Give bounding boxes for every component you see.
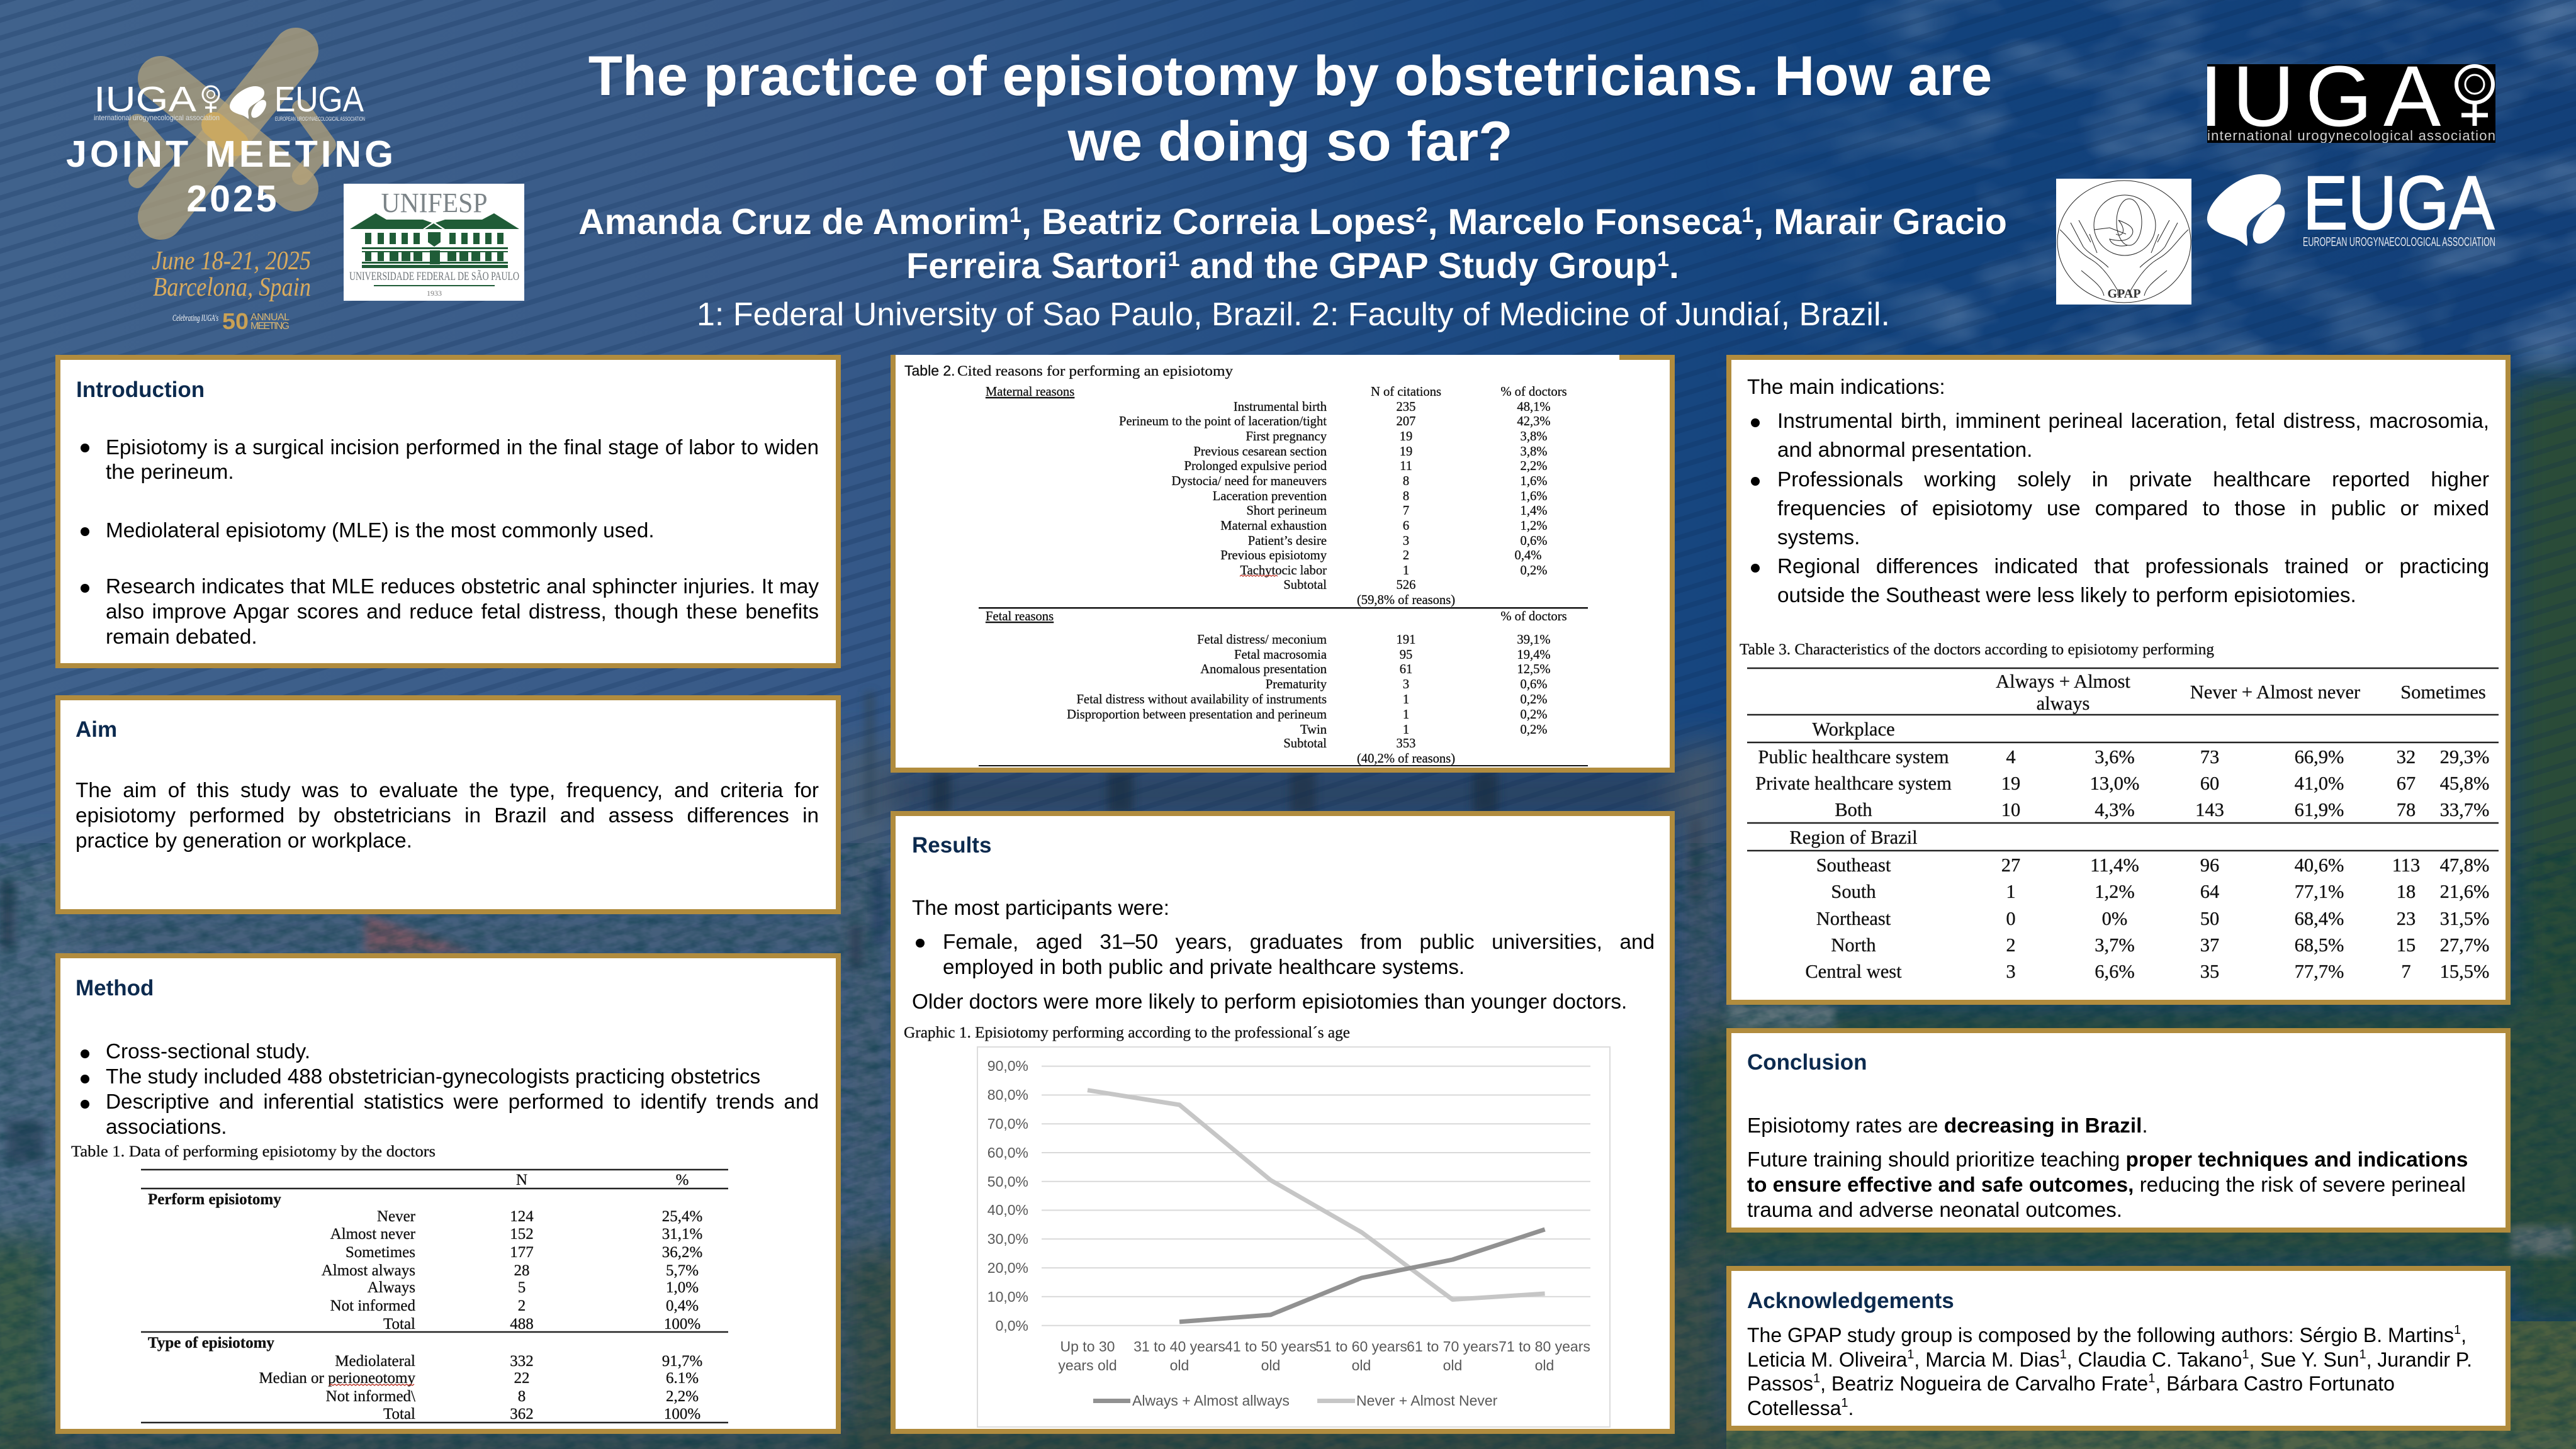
y axis labels: 30,0% bbox=[987, 1231, 1028, 1247]
y axis labels: 40,0% bbox=[987, 1202, 1028, 1218]
heading: aim: Aim bbox=[76, 717, 117, 742]
bullet list: introduction: Episiotomy is a surgical incision performed in the final stage of labor to widen bbox=[106, 435, 819, 459]
bullet list: introduction: the perineum. bbox=[106, 461, 234, 484]
y axis labels: 0,0% bbox=[996, 1318, 1028, 1334]
anniversary mark: MEETING bbox=[250, 321, 290, 332]
conclusion recommendation: to ensure effective and safe outcomes, reducing the risk of severe perineal bbox=[1747, 1173, 2466, 1197]
table 3: Northeast bbox=[1816, 908, 1891, 929]
authors: Amanda Cruz de Amorim1, Beatriz Correia Lopes2, Marcelo Fonseca1, Marair Gracio bbox=[578, 202, 2007, 242]
table 1: Total bbox=[383, 1406, 415, 1423]
table 1 caption: Table 1. Data of performing episiotomy by the doctors bbox=[71, 1142, 436, 1160]
table 3: 33,7% bbox=[2440, 799, 2489, 820]
table 2: Maternal exhaustion bbox=[1220, 519, 1327, 533]
authors bbox=[578, 202, 2007, 287]
table 3: 3,7% bbox=[2095, 934, 2135, 956]
table 3: 27 bbox=[2001, 854, 2020, 876]
logo: UNIFESP: UNIFESP bbox=[381, 187, 487, 218]
table 3: Private healthcare system bbox=[1755, 773, 1952, 794]
table 2: 1 bbox=[1403, 708, 1409, 722]
table 1: 488 bbox=[510, 1316, 534, 1333]
bullet list: indications: Regional differences indicated that professionals trained or practicing bbox=[1777, 555, 2489, 578]
small IUGA logotype: IUGA bbox=[94, 79, 196, 120]
table 2: 42,3% bbox=[1517, 415, 1551, 428]
table 2: 0,4% bbox=[1515, 549, 1541, 562]
bullet list: indications: systems. bbox=[1777, 526, 1860, 549]
x axis labels: old bbox=[1535, 1357, 1554, 1373]
anniversary mark: ANNUAL bbox=[250, 312, 290, 323]
series: always + almost always bbox=[1179, 1229, 1545, 1322]
table 2: Dystocia/ need for maneuvers bbox=[1172, 474, 1327, 488]
table 1: Always bbox=[368, 1279, 415, 1296]
panel: results bbox=[891, 811, 1675, 1434]
graphic 1 caption: Graphic 1. Episiotomy performing according to the professional´s age bbox=[904, 1024, 1350, 1041]
conclusion recommendation bbox=[1747, 1148, 2468, 1223]
table 3: 32 bbox=[2397, 746, 2416, 768]
table 3: 23 bbox=[2397, 908, 2416, 929]
table 1: 332 bbox=[510, 1353, 534, 1370]
acknowledgements text: Cotellessa1. bbox=[1747, 1396, 1853, 1419]
legend: Never + Almost Never bbox=[1356, 1392, 1498, 1409]
bullet list: introduction bbox=[81, 435, 819, 649]
table 2: Tachytocic labor bbox=[1240, 564, 1327, 578]
x axis labels: old bbox=[1443, 1357, 1462, 1373]
title bbox=[588, 44, 1992, 174]
table 1: 6.1% bbox=[666, 1370, 699, 1387]
table 3: 4,3% bbox=[2095, 799, 2135, 820]
table 1: 100% bbox=[664, 1316, 700, 1333]
table 3: 4 bbox=[2006, 746, 2016, 768]
panel: aim bbox=[55, 695, 841, 914]
table 1: Never bbox=[377, 1208, 416, 1225]
anniversary mark: 50 bbox=[222, 308, 249, 334]
table 3: North bbox=[1831, 934, 1876, 956]
table 3: 3,6% bbox=[2095, 746, 2135, 768]
panel: acknowledgements bbox=[1726, 1266, 2511, 1431]
x axis labels: old bbox=[1352, 1357, 1371, 1373]
table 3: 50 bbox=[2200, 908, 2219, 929]
panel: introduction bbox=[55, 355, 841, 668]
table 2: 2,2% bbox=[1521, 459, 1547, 473]
table 3: 40,6% bbox=[2295, 854, 2344, 876]
logo: UNIFESP bbox=[344, 184, 524, 301]
authors: Ferreira Sartori1 and the GPAP Study Group1. bbox=[906, 246, 1679, 286]
table 2: 235 bbox=[1397, 400, 1415, 414]
table 3: 60 bbox=[2200, 773, 2219, 794]
table 3: Sometimes bbox=[2400, 681, 2486, 703]
panel: method bbox=[55, 953, 841, 1434]
table 1: Not informed bbox=[330, 1297, 415, 1314]
table 2: Twin bbox=[1300, 723, 1327, 737]
table 3 caption: Table 3. Characteristics of the doctors according to episiotomy performing bbox=[1740, 641, 2214, 658]
conclusion recommendation: trauma and adverse neonatal outcomes. bbox=[1747, 1199, 2122, 1222]
table 2: Patient’s desire bbox=[1248, 534, 1327, 548]
table 3: 0 bbox=[2006, 908, 2016, 929]
results note: Older doctors were more likely to perform episiotomies than younger doctors. bbox=[912, 990, 1627, 1014]
results bullet: employed in both public and private healthcare systems. bbox=[943, 956, 1465, 979]
aim text: The aim of this study was to evaluate the type, frequency, and criteria for bbox=[76, 779, 819, 802]
logo: GPAP bbox=[2056, 179, 2191, 305]
bullet list: indications: Instrumental birth, imminent perineal laceration, fetal distress, macrosomia, bbox=[1777, 410, 2489, 433]
y axis labels: 50,0% bbox=[987, 1173, 1028, 1190]
table 2: 11 bbox=[1400, 459, 1412, 473]
legend: Always + Almost allways bbox=[1132, 1392, 1290, 1409]
table 1: Almost always bbox=[322, 1262, 415, 1279]
logo: GPAP: GPAP bbox=[2108, 287, 2140, 301]
x axis labels: old bbox=[1170, 1357, 1189, 1373]
table 2: Fetal distress without availability of instruments bbox=[1076, 693, 1327, 707]
table 1: 1,0% bbox=[666, 1279, 699, 1296]
aim text: practice by generation or workplace. bbox=[76, 829, 412, 853]
table 3: 6,6% bbox=[2095, 961, 2135, 982]
table 3: 77,7% bbox=[2295, 961, 2344, 982]
line chart bbox=[976, 1046, 1611, 1428]
table 2: 3 bbox=[1403, 534, 1409, 548]
table 1: 124 bbox=[510, 1208, 534, 1225]
table 3: 64 bbox=[2200, 881, 2219, 902]
y axis labels: 60,0% bbox=[987, 1144, 1028, 1161]
x axis labels: old bbox=[1261, 1357, 1280, 1373]
table 3: Central west bbox=[1805, 961, 1902, 982]
legend bbox=[1093, 1392, 1498, 1409]
affiliations: 1: Federal University of Sao Paulo, Brazil. 2: Faculty of Medicine of Jundiaí, Brazil. bbox=[697, 296, 1890, 333]
bullet list: indications: outside the Southeast were less likely to perform episiotomies. bbox=[1777, 584, 2356, 607]
table 1: 2,2% bbox=[666, 1388, 699, 1405]
table 1: Sometimes bbox=[346, 1244, 415, 1261]
table 2: 0,2% bbox=[1521, 693, 1547, 707]
table 1: 31,1% bbox=[662, 1226, 702, 1243]
table 3: 96 bbox=[2200, 854, 2219, 876]
x axis labels: 41 to 50 years bbox=[1225, 1338, 1317, 1355]
table 2: % of doctors bbox=[1500, 385, 1567, 399]
table 1: 8 bbox=[518, 1388, 526, 1405]
table 2: Instrumental birth bbox=[1234, 400, 1327, 414]
table 2: Laceration prevention bbox=[1213, 490, 1327, 503]
logo: joint meeting 2025 bbox=[66, 28, 393, 334]
acknowledgements text: The GPAP study group is composed by the following authors: Sérgio B. Martins1, bbox=[1747, 1323, 2466, 1346]
table 2: Maternal reasons bbox=[986, 385, 1074, 399]
bullet list: method: The study included 488 obstetrician-gynecologists practicing obstetrics bbox=[106, 1065, 760, 1088]
table 2: 1 bbox=[1403, 564, 1409, 578]
table 1: 5,7% bbox=[666, 1262, 699, 1279]
table 2: Prolonged expulsive period bbox=[1184, 459, 1327, 473]
table 2: First pregnancy bbox=[1246, 430, 1327, 444]
table 1: 100% bbox=[664, 1406, 700, 1423]
table 1: % bbox=[676, 1172, 689, 1189]
anniversary mark bbox=[172, 308, 290, 334]
table 2: Perineum to the point of laceration/tight bbox=[1119, 415, 1327, 428]
bullet list: introduction: also improve Apgar scores and reduce fetal distress, though these benefits bbox=[106, 600, 819, 624]
table 3: South bbox=[1831, 881, 1876, 902]
series: never + almost never bbox=[1088, 1090, 1545, 1300]
table 2: 48,1% bbox=[1517, 400, 1551, 414]
small IUGA logotype bbox=[94, 79, 220, 122]
table 2: 12,5% bbox=[1517, 663, 1551, 676]
panel: conclusion bbox=[1726, 1028, 2511, 1233]
table 3: 2 bbox=[2006, 934, 2016, 956]
table 2: 7 bbox=[1403, 504, 1409, 518]
table 2: 6 bbox=[1403, 519, 1409, 533]
table 2: N of citations bbox=[1371, 385, 1441, 399]
table 2: 61 bbox=[1400, 663, 1412, 676]
acknowledgements text bbox=[1747, 1323, 2472, 1420]
bullet list: indications: and abnormal presentation. bbox=[1777, 439, 2032, 462]
table 3: Region of Brazil bbox=[1789, 827, 1918, 848]
icon: cupping hands bbox=[2060, 220, 2188, 296]
table 3: Never + Almost never bbox=[2190, 681, 2360, 703]
table 3: 27,7% bbox=[2440, 934, 2489, 956]
table 2: 1 bbox=[1403, 723, 1409, 737]
dates: June 18-21, 2025 bbox=[152, 247, 311, 276]
table 2: 191 bbox=[1397, 633, 1415, 647]
table 2: 0,2% bbox=[1521, 564, 1547, 578]
panel: main indications and table 3 bbox=[1726, 355, 2511, 1005]
table 2: 19 bbox=[1400, 430, 1412, 444]
icon: womb and fetus bbox=[2094, 195, 2156, 255]
title: The practice of episiotomy by obstetricians. How are bbox=[588, 44, 1992, 107]
table 1: 28 bbox=[514, 1262, 530, 1279]
table 2: 0,2% bbox=[1521, 723, 1547, 737]
bullet list: method: associations. bbox=[106, 1116, 227, 1139]
table 3: 1 bbox=[2006, 881, 2016, 902]
table 1: 91,7% bbox=[662, 1353, 702, 1370]
table 2: 1,4% bbox=[1521, 504, 1547, 518]
heading: results: Results bbox=[912, 833, 991, 858]
table 1: 177 bbox=[510, 1244, 534, 1261]
table 1: Total bbox=[383, 1316, 415, 1333]
table 3: 11,4% bbox=[2090, 854, 2139, 876]
anniversary mark: Celebrating IUGA's bbox=[172, 313, 218, 323]
joint meeting text: JOINT MEETING bbox=[66, 133, 393, 175]
icon: gold X mark bbox=[137, 50, 327, 217]
table 2: 3,8% bbox=[1521, 445, 1547, 459]
panel: table 2 bbox=[891, 355, 1675, 773]
table 3: 1,2% bbox=[2095, 881, 2135, 902]
table 1: Almost never bbox=[330, 1226, 416, 1243]
table 3: Workplace bbox=[1812, 719, 1895, 740]
table 3: 15 bbox=[2397, 934, 2416, 956]
heading: method: Method bbox=[76, 976, 154, 1000]
table 2: 0,2% bbox=[1521, 708, 1547, 722]
table 3: 61,9% bbox=[2295, 799, 2344, 820]
aim text bbox=[76, 778, 819, 854]
x axis labels: 51 to 60 years bbox=[1315, 1338, 1407, 1355]
table 1: 362 bbox=[510, 1406, 534, 1423]
table 3: 18 bbox=[2397, 881, 2416, 902]
bullet list: indications: Professionals working solely in private healthcare reported higher bbox=[1777, 468, 2489, 491]
conclusion statement: Episiotomy rates are decreasing in Brazil. bbox=[1747, 1114, 2148, 1138]
acknowledgements text: Passos1, Beatriz Nogueira de Carvalho Frate1, Bárbara Castro Fortunato bbox=[1747, 1372, 2395, 1395]
table 2: 526 bbox=[1397, 578, 1415, 592]
small EUGA logotype bbox=[230, 79, 365, 123]
x axis labels: Up to 30 bbox=[1060, 1338, 1115, 1355]
location: Barcelona, Spain bbox=[153, 273, 311, 302]
table 2: Subtotal bbox=[1283, 578, 1327, 592]
table 3: 41,0% bbox=[2295, 773, 2344, 794]
table 1: N bbox=[516, 1172, 527, 1189]
y axis labels: 80,0% bbox=[987, 1087, 1028, 1103]
table 3: 7 bbox=[2401, 961, 2411, 982]
table 2: 207 bbox=[1397, 415, 1415, 428]
results intro: The most participants were: bbox=[912, 897, 1169, 920]
table 1: 25,4% bbox=[662, 1208, 702, 1225]
table 2: Fetal macrosomia bbox=[1234, 648, 1327, 662]
x axis labels bbox=[1058, 1338, 1590, 1373]
bullet list: indications: frequencies of episiotomy use compared to those in public or mixed bbox=[1777, 497, 2489, 520]
table 1: Perform episiotomy bbox=[148, 1191, 281, 1208]
table 2: Short perineum bbox=[1246, 504, 1327, 518]
table 3: 3 bbox=[2006, 961, 2016, 982]
bullet list: introduction: remain debated. bbox=[106, 625, 257, 649]
table 1: 2 bbox=[518, 1297, 526, 1314]
table 3: 73 bbox=[2200, 746, 2219, 768]
table 1: Type of episiotomy bbox=[148, 1334, 274, 1351]
small EUGA logotype: EUGA bbox=[274, 79, 364, 120]
heading: acknowledgements: Acknowledgements bbox=[1747, 1289, 1954, 1313]
table 1: 152 bbox=[510, 1226, 534, 1243]
small IUGA logotype: international urogynecological association bbox=[94, 113, 220, 122]
table 3: Both bbox=[1835, 799, 1872, 820]
table 3: 67 bbox=[2397, 773, 2416, 794]
table 2: % of doctors bbox=[1500, 610, 1567, 624]
x axis labels: years old bbox=[1058, 1357, 1117, 1373]
table 3: 45,8% bbox=[2440, 773, 2489, 794]
aim text: episiotomy performed by obstetricians in Brazil and assess differences in bbox=[76, 804, 819, 827]
table 2: 8 bbox=[1403, 490, 1409, 503]
table 2: (59,8% of reasons) bbox=[1357, 593, 1455, 607]
y axis labels: 90,0% bbox=[987, 1058, 1028, 1074]
table 2: 8 bbox=[1403, 474, 1409, 488]
bullet list: introduction: Research indicates that MLE reduces obstetric anal sphincter injuries. It may bbox=[106, 575, 819, 598]
table 3: always bbox=[2037, 693, 2089, 714]
bullet list: method bbox=[81, 1039, 823, 1143]
y axis labels: 70,0% bbox=[987, 1116, 1028, 1132]
table 3: 113 bbox=[2392, 854, 2420, 876]
table 3: 77,1% bbox=[2295, 881, 2344, 902]
table 3: 29,3% bbox=[2440, 746, 2489, 768]
table 2: 0,6% bbox=[1521, 534, 1547, 548]
table 2 bbox=[900, 361, 1624, 770]
table 1: Not informed\ bbox=[326, 1388, 415, 1405]
table 2: Subtotal bbox=[1283, 737, 1327, 751]
logo: UNIFESP: 1933 bbox=[427, 289, 442, 298]
bullet list: method: Descriptive and inferential statistics were performed to identify trends and bbox=[106, 1090, 819, 1114]
table 2: Fetal distress/ meconium bbox=[1197, 633, 1327, 647]
table 3: 31,5% bbox=[2440, 908, 2489, 929]
indications intro: The main indications: bbox=[1747, 376, 1945, 399]
table 2: 3 bbox=[1403, 678, 1409, 691]
table 3: 37 bbox=[2200, 934, 2219, 956]
icon: female symbol bbox=[2456, 66, 2493, 126]
table 1: Median or perioneotomy bbox=[259, 1370, 415, 1387]
heading: conclusion: Conclusion bbox=[1747, 1050, 1867, 1075]
table 2: 1 bbox=[1403, 693, 1409, 707]
icon: university building bbox=[350, 213, 519, 268]
table 2: 1,6% bbox=[1521, 474, 1547, 488]
table 3: 10 bbox=[2001, 799, 2020, 820]
table 2: 39,1% bbox=[1517, 633, 1551, 647]
bullet list: method: Cross-sectional study. bbox=[106, 1040, 310, 1063]
table 1 bbox=[68, 1139, 735, 1428]
bullet list: indications bbox=[1751, 407, 2494, 640]
table 2: Disproportion between presentation and perineum bbox=[1067, 708, 1327, 722]
heading: introduction: Introduction bbox=[76, 378, 205, 402]
table 3: 0% bbox=[2102, 908, 2127, 929]
table 3: 13,0% bbox=[2090, 773, 2139, 794]
table 3: 68,4% bbox=[2295, 908, 2344, 929]
table 3: 47,8% bbox=[2440, 854, 2489, 876]
table 2: 19 bbox=[1400, 445, 1412, 459]
table 3: Public healthcare system bbox=[1758, 746, 1949, 768]
y axis labels bbox=[987, 1058, 1028, 1334]
table 2: 95 bbox=[1400, 648, 1412, 662]
table 3: 21,6% bbox=[2440, 881, 2489, 902]
table 2: 353 bbox=[1397, 737, 1415, 751]
table 2: (40,2% of reasons) bbox=[1357, 752, 1455, 766]
table 1: 0,4% bbox=[666, 1297, 699, 1314]
bullet list: introduction: Mediolateral episiotomy (MLE) is the most commonly used. bbox=[106, 519, 655, 542]
table 3: 78 bbox=[2397, 799, 2416, 820]
title: we doing so far? bbox=[1067, 109, 1513, 172]
table 3: Southeast bbox=[1816, 854, 1891, 876]
table 2: Fetal reasons bbox=[986, 610, 1054, 624]
x axis labels: 31 to 40 years bbox=[1133, 1338, 1225, 1355]
results bullet: Female, aged 31–50 years, graduates from public universities, and bbox=[943, 931, 1655, 954]
table 3: 66,9% bbox=[2295, 746, 2344, 768]
x axis labels: 71 to 80 years bbox=[1499, 1338, 1590, 1355]
table 2 caption: Cited reasons for performing an episiotomy bbox=[957, 363, 1233, 379]
table 3: 19 bbox=[2001, 773, 2020, 794]
table 2: Prematurity bbox=[1266, 678, 1327, 691]
table 1: 36,2% bbox=[662, 1244, 702, 1261]
table 3: 15,5% bbox=[2440, 961, 2489, 982]
table 2 caption: Table 2. bbox=[904, 362, 955, 379]
table 2: Previous cesarean section bbox=[1193, 445, 1327, 459]
table 3 bbox=[1736, 638, 2507, 1000]
table 1: 5 bbox=[518, 1279, 526, 1296]
table 2: 3,8% bbox=[1521, 430, 1547, 444]
table 3: Always + Almost bbox=[1996, 671, 2130, 692]
conclusion recommendation: Future training should prioritize teaching proper techniques and indications bbox=[1747, 1148, 2468, 1172]
table 2: 2 bbox=[1403, 549, 1409, 562]
table 2: 19,4% bbox=[1517, 648, 1551, 662]
acknowledgements text: Leticia M. Oliveira1, Marcia M. Dias1, Claudia C. Takano1, Sue Y. Sun1, Jurandir P. bbox=[1747, 1348, 2472, 1370]
table 2: 1,2% bbox=[1521, 519, 1547, 533]
logo: EUGA bbox=[2207, 171, 2495, 249]
table 1: Mediolateral bbox=[335, 1353, 415, 1370]
table 2: 0,6% bbox=[1521, 678, 1547, 691]
table 3: 143 bbox=[2195, 799, 2224, 820]
table 3: 35 bbox=[2200, 961, 2219, 982]
table 2: 1,6% bbox=[1521, 490, 1547, 503]
y axis labels: 20,0% bbox=[987, 1260, 1028, 1276]
icon: bladder bbox=[2207, 174, 2291, 249]
table 2: Anomalous presentation bbox=[1200, 663, 1327, 676]
year: 2025 bbox=[186, 178, 279, 220]
x axis labels: 61 to 70 years bbox=[1407, 1338, 1499, 1355]
table 2: Previous episiotomy bbox=[1220, 549, 1327, 562]
results bullet bbox=[916, 930, 1658, 980]
table 1: 22 bbox=[514, 1370, 530, 1387]
table 3: 68,5% bbox=[2295, 934, 2344, 956]
y axis labels: 10,0% bbox=[987, 1289, 1028, 1305]
